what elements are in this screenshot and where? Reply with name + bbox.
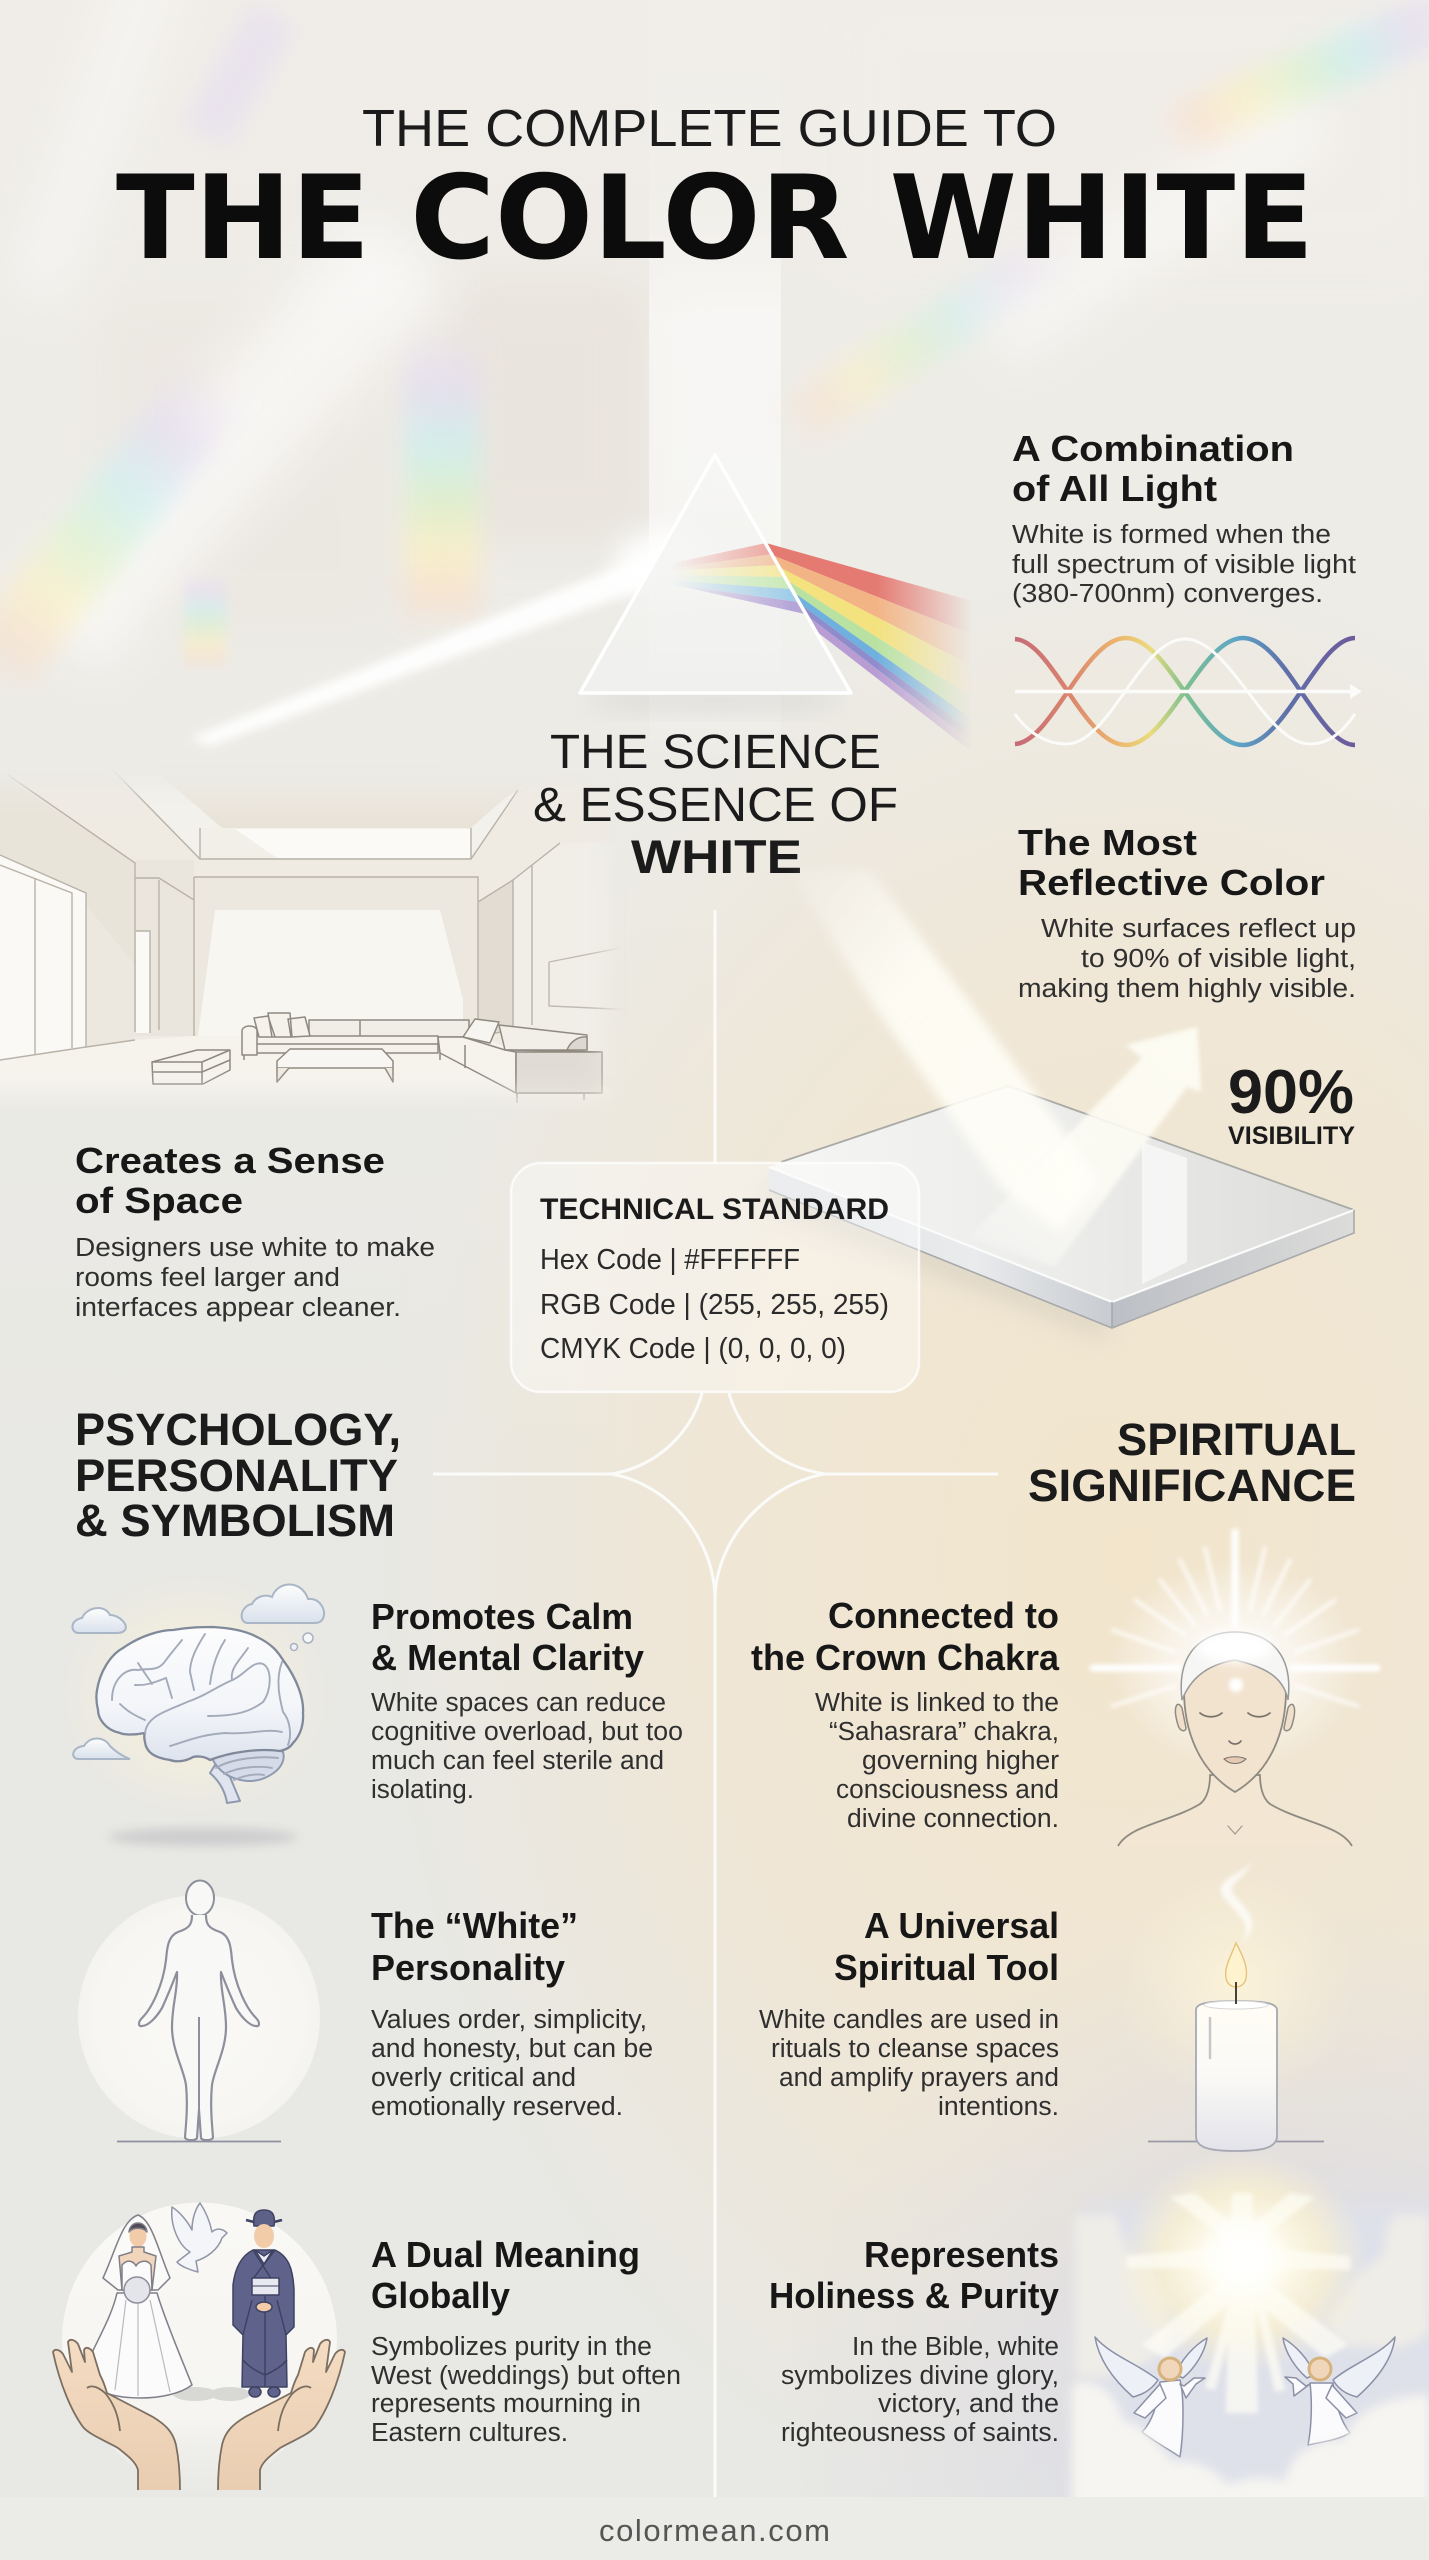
- text block: promotes calm and mental clarity: Promotes Calm: [371, 1596, 633, 1637]
- heading: the science and essence of white: [533, 726, 898, 883]
- text block: promotes calm and mental clarity: much can feel sterile and: [371, 1747, 664, 1775]
- text block: represents holiness and purity: In the Bible, white: [852, 2333, 1059, 2361]
- angel left: [1095, 2337, 1207, 2457]
- clouds foreground: [1072, 2382, 1429, 2510]
- text block: a universal spiritual tool: White candles are used in: [759, 2006, 1059, 2034]
- text block: the most reflective color: to 90% of visible light,: [1081, 945, 1356, 973]
- text block: connected to the crown chakra: White is linked to the: [815, 1689, 1059, 1717]
- text block: the white personality: overly critical and: [371, 2064, 576, 2092]
- hands: [53, 2340, 345, 2490]
- text block: represents holiness and purity: righteousness of saints.: [781, 2419, 1059, 2447]
- text block: connected to the crown chakra: “Sahasrara” chakra,: [829, 1718, 1059, 1746]
- dove: [172, 2203, 227, 2272]
- stat: 90 percent visibility: VISIBILITY: [1228, 1122, 1355, 1150]
- reflected arrow: [969, 1027, 1201, 1267]
- text block: connected to the crown chakra: governing higher: [862, 1747, 1060, 1775]
- back clouds: [1075, 2215, 1429, 2378]
- heading: the science and essence of white: THE SCIENCE: [550, 726, 881, 779]
- title: THE COMPLETE GUIDE TO: [362, 100, 1057, 158]
- text block: connected to the crown chakra: [751, 1595, 1060, 1833]
- text block: the most reflective color: [1018, 822, 1356, 1003]
- text block: creates a sense of space: rooms feel larger and: [75, 1264, 340, 1292]
- title: THE COLOR WHITE: [116, 151, 1314, 286]
- text block: promotes calm and mental clarity: cognitive overload, but too: [371, 1718, 683, 1746]
- text block: creates a sense of space: of Space: [75, 1180, 243, 1221]
- text block: represents holiness and purity: symbolizes divine glory,: [781, 2362, 1059, 2390]
- icon: crown chakra meditating face: [1093, 1532, 1377, 1846]
- text block: a universal spiritual tool: Spiritual Tool: [834, 1947, 1059, 1988]
- text block: a universal spiritual tool: A Universal: [864, 1905, 1059, 1946]
- text block: a universal spiritual tool: and amplify prayers and: [779, 2064, 1059, 2092]
- panel: technical standard card: [511, 1163, 919, 1392]
- illustration: heavenly light with clouds and angels: [1072, 2152, 1429, 2510]
- text block: the white personality: and honesty, but can be: [371, 2035, 653, 2063]
- text block: a combination of all light: (380-700nm) converges.: [1012, 580, 1323, 608]
- text block: the most reflective color: making them highly visible.: [1018, 975, 1356, 1003]
- bride: [90, 2215, 192, 2398]
- heading: the science and essence of white: WHITE: [631, 830, 802, 883]
- text block: represents holiness and purity: [769, 2234, 1060, 2447]
- icon: prism with incoming beam and rainbow: [190, 455, 976, 755]
- text block: a universal spiritual tool: intentions.: [938, 2093, 1059, 2121]
- text block: a combination of all light: [1012, 428, 1356, 608]
- text block: the most reflective color: White surfaces reflect up: [1041, 915, 1356, 943]
- footer band with site name: colormean.com: [599, 2513, 830, 2548]
- text block: a dual meaning globally: Symbolizes purity in the: [371, 2333, 652, 2361]
- text block: connected to the crown chakra: consciousness and: [836, 1776, 1059, 1804]
- text block: represents holiness and purity: Represents: [864, 2234, 1059, 2275]
- rainbow outgoing: [768, 544, 966, 743]
- text block: the white personality: Personality: [371, 1947, 566, 1988]
- coffee table: [277, 1049, 393, 1082]
- text block: the most reflective color: Reflective Color: [1018, 862, 1325, 903]
- text block: a combination of all light: full spectrum of visible light: [1012, 551, 1356, 579]
- text block: a universal spiritual tool: [759, 1905, 1059, 2121]
- text block: connected to the crown chakra: Connected to: [828, 1595, 1059, 1636]
- text block: represents holiness and purity: Holiness & Purity: [769, 2275, 1060, 2316]
- sofa: [242, 1013, 602, 1103]
- text block: a dual meaning globally: Eastern cultures.: [371, 2419, 568, 2447]
- text block: represents holiness and purity: victory, and the: [878, 2390, 1059, 2418]
- heading: spiritual significance: [1028, 1414, 1356, 1511]
- icon: bride, groom, dove and open hands: [53, 2203, 345, 2490]
- panel: technical standard card: TECHNICAL STANDARD: [540, 1193, 889, 1226]
- heading: psychology, personality and symbolism: PSYCHOLOGY,: [75, 1404, 401, 1455]
- heading: the science and essence of white: & ESSENCE OF: [533, 779, 898, 832]
- heading: spiritual significance: SIGNIFICANCE: [1028, 1460, 1356, 1511]
- text block: a combination of all light: of All Light: [1012, 468, 1217, 509]
- text block: promotes calm and mental clarity: isolating.: [371, 1776, 474, 1804]
- text block: the white personality: emotionally reserved.: [371, 2093, 623, 2121]
- heading: psychology, personality and symbolism: [75, 1404, 401, 1546]
- text block: connected to the crown chakra: the Crown Chakra: [751, 1637, 1060, 1678]
- heading: psychology, personality and symbolism: PERSONALITY: [75, 1450, 398, 1501]
- text block: promotes calm and mental clarity: & Mental Clarity: [371, 1637, 645, 1678]
- angel right: [1283, 2337, 1395, 2445]
- text block: a dual meaning globally: A Dual Meaning: [371, 2234, 640, 2275]
- footer band with site name: [0, 2497, 1429, 2560]
- text block: a dual meaning globally: represents mourning in: [371, 2390, 641, 2418]
- panel: technical standard card: Hex Code | #FFFFFF: [540, 1244, 800, 1276]
- chart: light wave spectrum: [1015, 638, 1362, 745]
- text block: a combination of all light: A Combination: [1012, 428, 1294, 469]
- text block: the most reflective color: The Most: [1018, 822, 1197, 863]
- icon: brain with clouds: [55, 1570, 335, 1846]
- illustration: reflective slab with light arrow: [765, 870, 1354, 1340]
- text block: a combination of all light: White is formed when the: [1012, 521, 1331, 549]
- connector lines between sections: [433, 910, 998, 2497]
- icon: white candle with flame and smoke: [1116, 1862, 1356, 2151]
- text block: creates a sense of space: [75, 1140, 435, 1322]
- text block: creates a sense of space: Creates a Sense: [75, 1140, 385, 1181]
- groom: [233, 2210, 294, 2397]
- background light streaks with rainbow refractions: [0, 0, 1429, 760]
- text block: the white personality: [371, 1905, 653, 2121]
- text block: the white personality: Values order, simplicity,: [371, 2006, 647, 2034]
- heading: spiritual significance: SPIRITUAL: [1117, 1414, 1356, 1465]
- text block: creates a sense of space: Designers use white to make: [75, 1234, 435, 1262]
- panel: technical standard card: CMYK Code | (0, 0, 0, 0): [540, 1333, 846, 1365]
- text block: a dual meaning globally: West (weddings) but often: [371, 2362, 681, 2390]
- text block: connected to the crown chakra: divine connection.: [847, 1805, 1059, 1833]
- text block: creates a sense of space: interfaces appear cleaner.: [75, 1294, 401, 1322]
- text block: a dual meaning globally: [371, 2234, 681, 2447]
- text block: a dual meaning globally: Globally: [371, 2275, 511, 2316]
- ottoman: [152, 1050, 230, 1084]
- panel: technical standard card: RGB Code | (255, 255, 255): [540, 1289, 889, 1321]
- text block: the white personality: The “White”: [371, 1905, 578, 1946]
- stat: 90 percent visibility: 90%: [1228, 1058, 1354, 1127]
- illustration: white minimalist living room: [0, 762, 640, 1112]
- text block: a universal spiritual tool: rituals to cleanse spaces: [771, 2035, 1059, 2063]
- text block: promotes calm and mental clarity: [371, 1596, 683, 1804]
- rainbow inside prism: [680, 544, 804, 614]
- icon: white personality figure: [78, 1880, 320, 2142]
- heading: psychology, personality and symbolism: & SYMBOLISM: [75, 1495, 395, 1546]
- text block: promotes calm and mental clarity: White spaces can reduce: [371, 1689, 666, 1717]
- incoming beam: [790, 870, 1099, 1232]
